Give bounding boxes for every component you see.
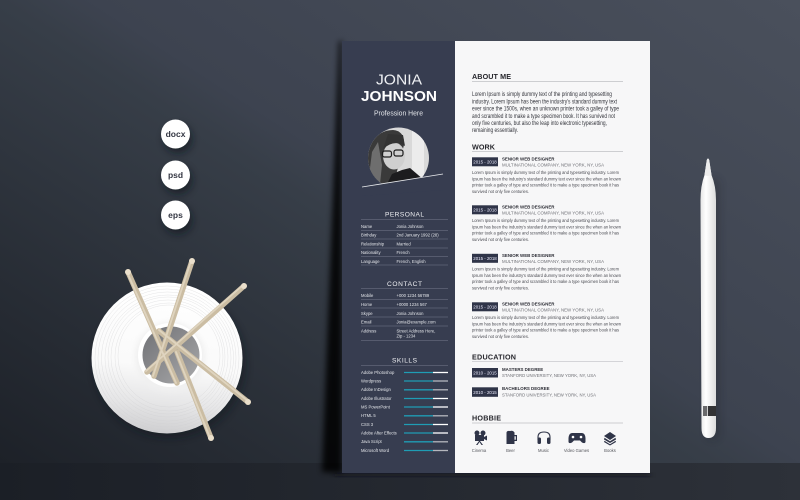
- section: skills: Wordpress: [361, 378, 381, 384]
- section: contact: Address: [361, 328, 376, 333]
- work entry 1: SENIOR WEB DESIGNER: [502, 156, 555, 161]
- section: education: EDUCATION: [472, 352, 516, 362]
- education entry 1: STANFORD UNIVERSITY, NEW YORK, NY, USA: [502, 373, 597, 379]
- education entry 2: [472, 386, 597, 398]
- education entry 2: 2010 - 2015: [473, 390, 497, 395]
- paper shadow: [322, 41, 342, 473]
- work entry 2: Ipsum has been the industry's standard dummy text ever since the when an known: [472, 224, 621, 229]
- section: skills: Adobe InDesign: [361, 387, 391, 392]
- section: contact: Skype: [361, 311, 373, 316]
- section: about me: ABOUT ME: [472, 72, 511, 81]
- education entry 1: MASTERS DEGREE: [502, 367, 543, 372]
- badge: eps: eps: [168, 210, 183, 220]
- section: skills: [361, 357, 448, 453]
- work entry 1: MULTINATIONAL COMPANY, NEW YORK, NY, USA: [502, 162, 605, 168]
- name: Profession Here: [374, 108, 423, 118]
- section: contact: Zip - 1234: [396, 334, 416, 338]
- resume paper: [342, 41, 650, 473]
- work entry 2: MULTINATIONAL COMPANY, NEW YORK, NY, USA: [502, 210, 605, 216]
- section: about me: only five centuries, but also the leap into electronic typesetting,: [472, 120, 607, 127]
- section: hobbie: Video Games: [564, 448, 589, 453]
- icon: video games controller: [568, 433, 586, 443]
- section: personal: Nationality: [361, 250, 381, 255]
- paper floor shadow: [335, 473, 650, 477]
- work entry 4: 2015 - 2018: [473, 304, 497, 310]
- pencil band: [703, 406, 716, 416]
- education entry 2: STANFORD UNIVERSITY, NEW YORK, NY, USA: [502, 392, 597, 398]
- section: personal: Language: [361, 259, 380, 264]
- work entry 3: SENIOR WEB DESIGNER: [502, 253, 555, 258]
- icon: cinema: [474, 430, 487, 445]
- work entry 1: Ipsum has been the industry's standard dummy text ever since the when an known: [472, 176, 621, 181]
- name: JOHNSON: [361, 89, 437, 105]
- section: skills: Java Script: [361, 439, 383, 444]
- section: personal: Relationship: [361, 242, 385, 246]
- work entry 3: Ipsum has been the industry's standard dummy text ever since the when an known: [472, 273, 621, 278]
- section: personal: 2nd January 1992 (28): [396, 233, 439, 238]
- work entry 4: survived not only five centuries.: [472, 334, 529, 339]
- badge: psd: psd: [168, 170, 183, 180]
- name: [361, 72, 437, 118]
- section: skills: Adobe After Effects: [361, 430, 397, 436]
- section: personal: Birthday: [361, 233, 377, 238]
- icon: music headphones: [538, 432, 550, 444]
- badge: docx: docx: [166, 129, 186, 139]
- panel: sidebar: [342, 41, 455, 473]
- section: skills: Adobe Illustrator: [361, 396, 392, 401]
- section: contact: +0000 1234 567: [396, 302, 428, 307]
- profile photo: [368, 128, 429, 184]
- name: JONIA: [376, 72, 422, 88]
- section: about me: industry. Lorem Ipsum has been the industry's standard dummy text: [472, 98, 617, 105]
- section: education: [472, 352, 623, 398]
- section: about me: ever since the 1500s, when an unknown printer took a galley of type: [472, 106, 619, 112]
- work entry 1: [472, 156, 621, 194]
- work entry 2: printer took a galley of type and scrambled it to make a type specimen book it has: [472, 231, 620, 236]
- section: about me: [472, 72, 623, 134]
- section: hobbie: [472, 414, 623, 453]
- section: contact: Jonia Johnson: [396, 311, 424, 316]
- work entry 2: [472, 204, 621, 242]
- section: personal: Jonia Johnson: [396, 224, 424, 229]
- section: personal: French, English: [396, 259, 426, 264]
- section: hobbie: Music: [538, 448, 549, 453]
- work entry 2: Lorem Ipsum is simply dummy text of the printing and typesetting industry. Lorem: [472, 218, 619, 223]
- work entry 3: survived not only five centuries.: [472, 285, 529, 290]
- work entry 3: [472, 253, 621, 290]
- section: hobbie: Books: [604, 448, 616, 453]
- work entry 2: SENIOR WEB DESIGNER: [502, 204, 555, 209]
- section: skills: HTML 5: [361, 413, 376, 418]
- section: skills: Microsoft Word: [361, 448, 390, 453]
- apple pencil: [700, 158, 720, 440]
- section: contact: Mobile: [361, 293, 374, 298]
- section: about me: and scrambled it to make a type specimen book. It has survived not: [472, 113, 615, 120]
- vase with wooden sticks: [92, 258, 251, 441]
- floor: [0, 463, 800, 500]
- work entry 1: Lorem Ipsum is simply dummy text of the printing and typesetting industry. Lorem: [472, 170, 619, 175]
- education entry 1: 2010 - 2015: [473, 370, 497, 376]
- icon: books stack: [604, 432, 616, 446]
- work entry 1: 2015 - 2018: [473, 160, 497, 164]
- section: personal: French: [396, 250, 410, 255]
- section: contact: Street Address Here,: [396, 328, 435, 333]
- section: skills: CSS 3: [361, 422, 374, 427]
- section: personal: Married: [396, 242, 411, 246]
- work entry 4: Lorem Ipsum is simply dummy text of the printing and typesetting industry. Lorem: [472, 315, 619, 320]
- education entry 2: BACHELORS DEGREE: [502, 386, 550, 391]
- work entry 4: printer took a galley of type and scrambled it to make a type specimen book it has: [472, 328, 620, 333]
- section: contact: [361, 281, 448, 340]
- work entry 3: printer took a galley of type and scrambled it to make a type specimen book it has: [472, 279, 620, 284]
- work entry 4: MULTINATIONAL COMPANY, NEW YORK, NY, USA: [502, 307, 605, 313]
- section: work: [472, 142, 623, 339]
- work entry 1: printer took a galley of type and scrambled it to make a type specimen book it has: [472, 183, 620, 188]
- work entry 4: Ipsum has been the industry's standard dummy text ever since the when an known: [472, 321, 621, 326]
- section: work: WORK: [472, 142, 496, 152]
- education entry 1: [472, 367, 597, 379]
- section: hobbie: Cinema: [472, 448, 487, 453]
- work entry 4: SENIOR WEB DESIGNER: [502, 301, 555, 306]
- section: skills: Adobe Photoshop: [361, 370, 395, 375]
- icon: beer: [506, 431, 517, 444]
- section: about me: Lorem Ipsum is simply dummy text of the printing and typesetting: [472, 91, 612, 98]
- work entry 3: MULTINATIONAL COMPANY, NEW YORK, NY, USA: [502, 259, 605, 265]
- section: skills: MS PowerPoint: [361, 404, 391, 410]
- section: contact: +000 1234 56789: [396, 293, 430, 298]
- section: hobbie: HOBBIE: [472, 414, 501, 422]
- section: personal: Name: [361, 224, 373, 229]
- section: contact: Jonia@example.com: [396, 320, 436, 324]
- work entry 3: Lorem Ipsum is simply dummy text of the printing and typesetting industry. Lorem: [472, 267, 619, 272]
- work entry 2: survived not only five centuries.: [472, 237, 529, 242]
- work entry 1: survived not only five centuries.: [472, 189, 529, 194]
- section: contact: CONTACT: [387, 281, 422, 288]
- section: personal: PERSONAL: [385, 211, 424, 218]
- photo cover slash: [362, 174, 443, 196]
- work entry 2: 2015 - 2018: [473, 208, 497, 212]
- section: skills: SKILLS: [392, 357, 418, 364]
- section: about me: remaining essentially.: [472, 127, 518, 134]
- section: hobbie: Beer: [506, 448, 516, 453]
- section: contact: Email: [361, 320, 372, 324]
- work entry 4: [472, 301, 621, 339]
- section: contact: Home: [361, 302, 373, 307]
- format badges: [161, 120, 192, 234]
- section: personal: [361, 211, 448, 265]
- work entry 3: 2015 - 2018: [473, 256, 497, 261]
